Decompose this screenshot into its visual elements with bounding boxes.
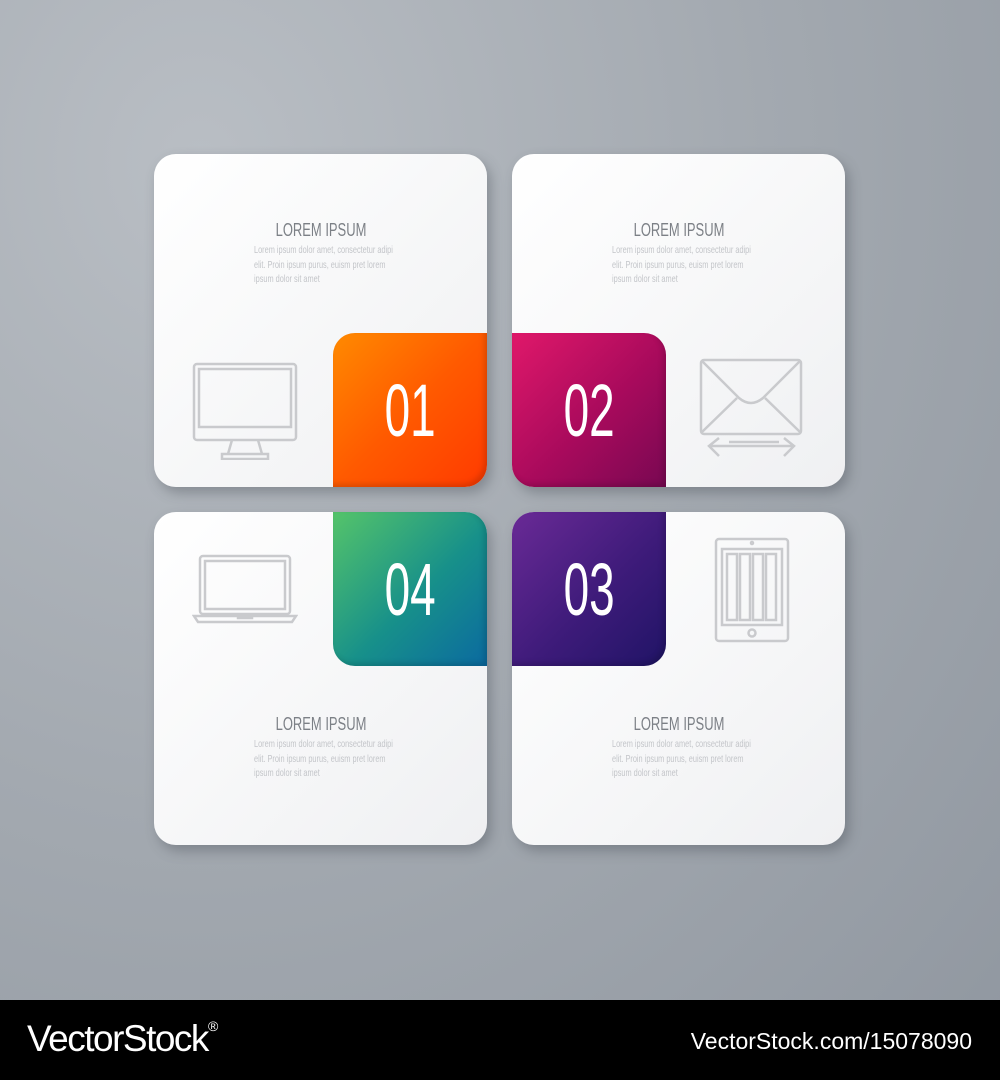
text block 2: LOREM IPSUM xyxy=(634,220,724,240)
text block 4: Lorem ipsum dolor amet, consectetur adipi xyxy=(254,738,393,750)
text block 2: elit. Proin ipsum purus, euism pret lorem xyxy=(612,258,744,270)
badge 02 xyxy=(512,333,666,487)
badge 04: 04 xyxy=(384,548,436,630)
text block 4: elit. Proin ipsum purus, euism pret lorem xyxy=(254,752,386,764)
text block 1: Lorem ipsum dolor amet, consectetur adipi xyxy=(254,244,393,256)
badge 04 xyxy=(333,512,487,666)
card 2 xyxy=(512,154,845,487)
badge 01 xyxy=(333,333,487,487)
icon: tablet xyxy=(714,538,790,642)
text block 1: LOREM IPSUM xyxy=(276,220,366,240)
footer logo: VectorStock® xyxy=(27,1018,217,1059)
text block 3 xyxy=(612,714,751,779)
text block 1: elit. Proin ipsum purus, euism pret lorem xyxy=(254,258,386,270)
card 3 xyxy=(512,512,845,845)
text block 4: ipsum dolor sit amet xyxy=(254,767,320,779)
badge 03: 03 xyxy=(563,548,615,630)
icon: monitor xyxy=(192,362,298,460)
text block 1: ipsum dolor sit amet xyxy=(254,273,320,285)
text block 3: elit. Proin ipsum purus, euism pret lorem xyxy=(612,752,744,764)
footer url: VectorStock.com/15078090 xyxy=(691,1028,972,1054)
text block 3: Lorem ipsum dolor amet, consectetur adipi xyxy=(612,738,751,750)
text block 4: LOREM IPSUM xyxy=(276,714,366,734)
text block 2 xyxy=(612,220,751,285)
text block 2: Lorem ipsum dolor amet, consectetur adipi xyxy=(612,244,751,256)
badge 02: 02 xyxy=(563,368,615,452)
text block 4 xyxy=(254,714,393,779)
text block 3: ipsum dolor sit amet xyxy=(612,767,678,779)
card 4 xyxy=(154,512,487,845)
badge 03 xyxy=(512,512,666,666)
icon: envelope xyxy=(700,358,802,457)
text block 2: ipsum dolor sit amet xyxy=(612,273,678,285)
icon: laptop xyxy=(192,554,298,624)
badge 01: 01 xyxy=(384,368,436,452)
footer bar xyxy=(0,1000,1000,1080)
text block 1 xyxy=(254,220,393,285)
card 1 xyxy=(154,154,487,487)
text block 3: LOREM IPSUM xyxy=(634,714,724,734)
